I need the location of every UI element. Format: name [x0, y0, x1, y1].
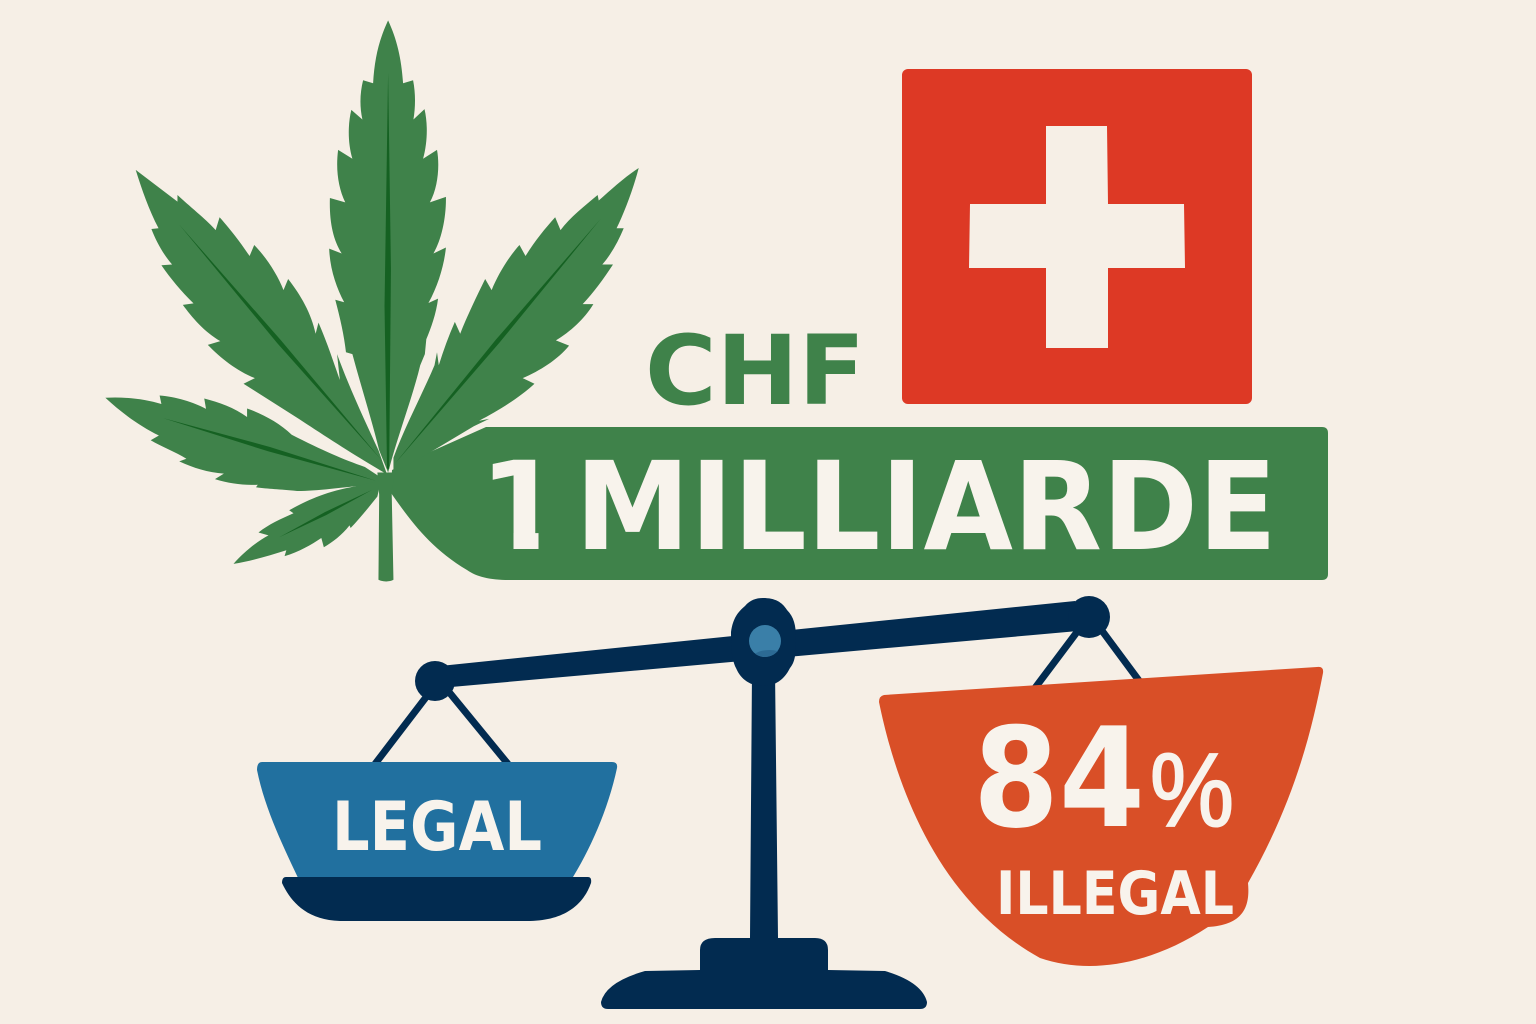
panel: illegal pan	[879, 667, 1323, 966]
legal label: LEGAL	[332, 788, 542, 867]
chf label: CHF	[645, 315, 865, 427]
scale pivot	[731, 598, 796, 686]
banner: 1 Milliarde	[391, 427, 1328, 580]
illegal label: ILLEGAL	[996, 859, 1234, 929]
illegal percent value: 84	[973, 698, 1145, 859]
scale stand	[601, 670, 927, 1009]
percent sign: %	[1150, 733, 1234, 849]
banner number: 1	[479, 436, 564, 578]
scale ropes	[375, 628, 1140, 764]
legal pan rim	[282, 877, 591, 921]
balance scale	[375, 596, 1140, 1009]
panel: legal pan	[257, 762, 617, 921]
icon: cannabis leaf	[105, 20, 639, 581]
scale beam	[440, 601, 1078, 688]
leaf veins	[163, 73, 601, 537]
flag cross	[969, 126, 1185, 348]
banner word: MILLIARDE	[575, 436, 1277, 578]
icon: swiss flag	[902, 69, 1252, 404]
